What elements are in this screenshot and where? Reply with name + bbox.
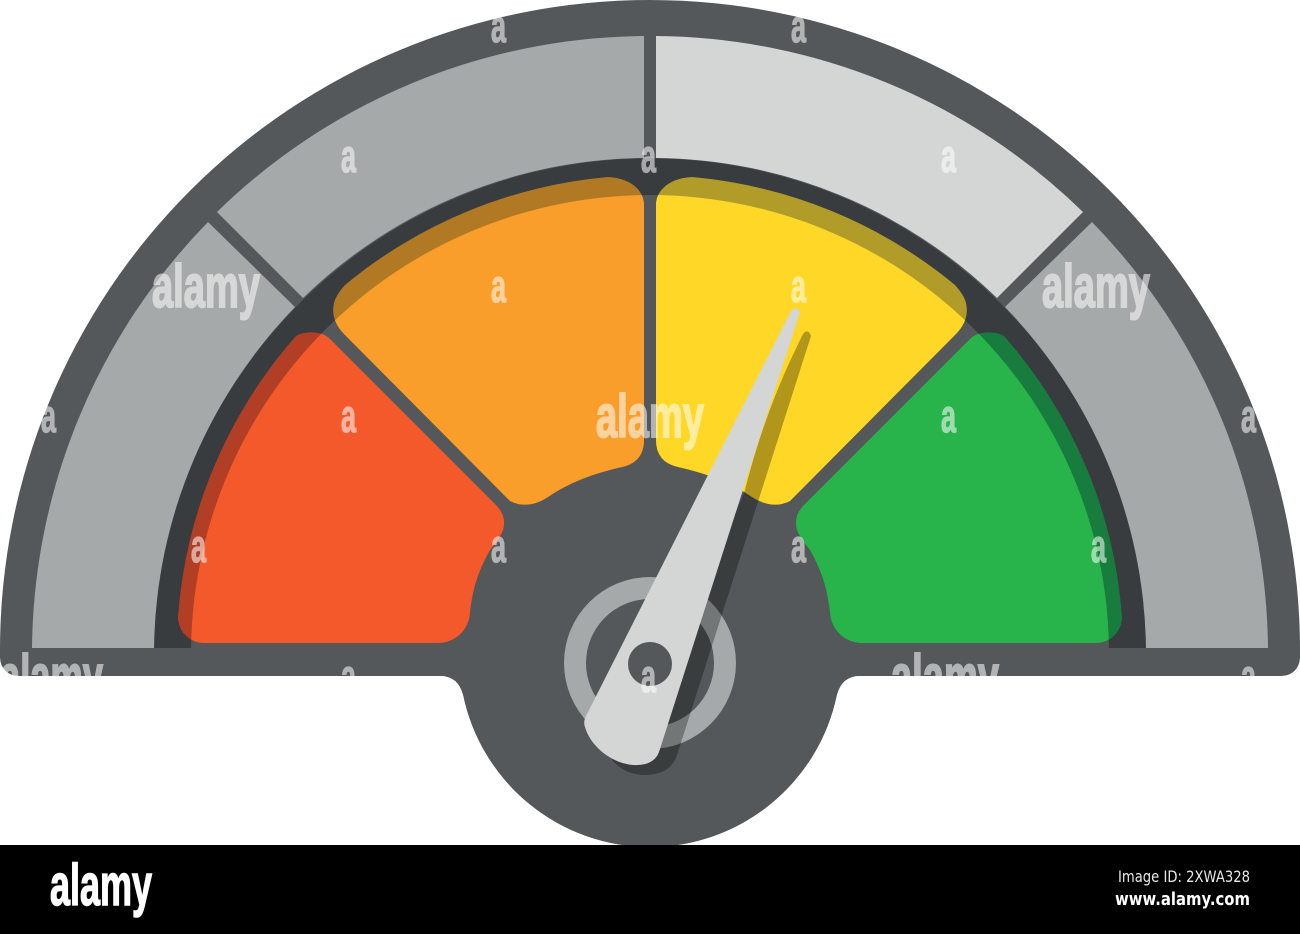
watermarks: alamy	[0, 643, 103, 710]
watermarks: alamy	[152, 253, 260, 320]
needle shadow	[612, 331, 811, 775]
segment: orange	[333, 177, 644, 505]
watermarks: a	[491, 0, 506, 52]
outer segment: far left	[32, 222, 295, 648]
watermarks: a	[791, 0, 806, 52]
watermarks: a	[1241, 650, 1256, 702]
outer segment: upper left	[217, 36, 644, 298]
watermarks	[0, 0, 1256, 710]
watermarks: a	[791, 520, 806, 572]
inner dial disc	[191, 195, 1109, 648]
watermarks: a	[941, 390, 956, 442]
watermarks: a	[1241, 390, 1256, 442]
outer segment: upper right	[656, 36, 1083, 298]
segment: yellow	[656, 177, 967, 505]
watermarks: a	[941, 130, 956, 182]
pivot ring	[564, 577, 736, 749]
website: www.alamy.com	[1115, 889, 1250, 910]
watermarks: alamy	[1042, 253, 1150, 320]
watermarks: alamy	[891, 643, 999, 710]
watermarks: a	[341, 650, 356, 702]
watermarks: a	[491, 520, 506, 572]
watermarks: a	[41, 390, 56, 442]
watermarks: a	[641, 650, 656, 702]
needle	[584, 308, 800, 765]
dark inner band	[154, 158, 1146, 648]
watermarks: a	[341, 130, 356, 182]
outer ring segments	[32, 36, 1268, 648]
watermarks: alamy	[596, 383, 704, 450]
image id: Image ID: 2XWA328	[1118, 867, 1250, 886]
footer bar	[0, 845, 1300, 934]
watermarks: a	[341, 390, 356, 442]
outer segment: far right	[1005, 222, 1268, 648]
white mask below the gauge bar	[0, 658, 1300, 847]
watermarks: a	[191, 520, 206, 572]
segment: green	[796, 332, 1122, 643]
watermarks: a	[491, 260, 506, 312]
watermarks: a	[1091, 520, 1106, 572]
watermarks: a	[791, 260, 806, 312]
segment: red	[178, 332, 504, 643]
needle pivot hole	[628, 642, 672, 686]
watermarks: a	[641, 130, 656, 182]
footer logo: alamy	[50, 853, 152, 918]
